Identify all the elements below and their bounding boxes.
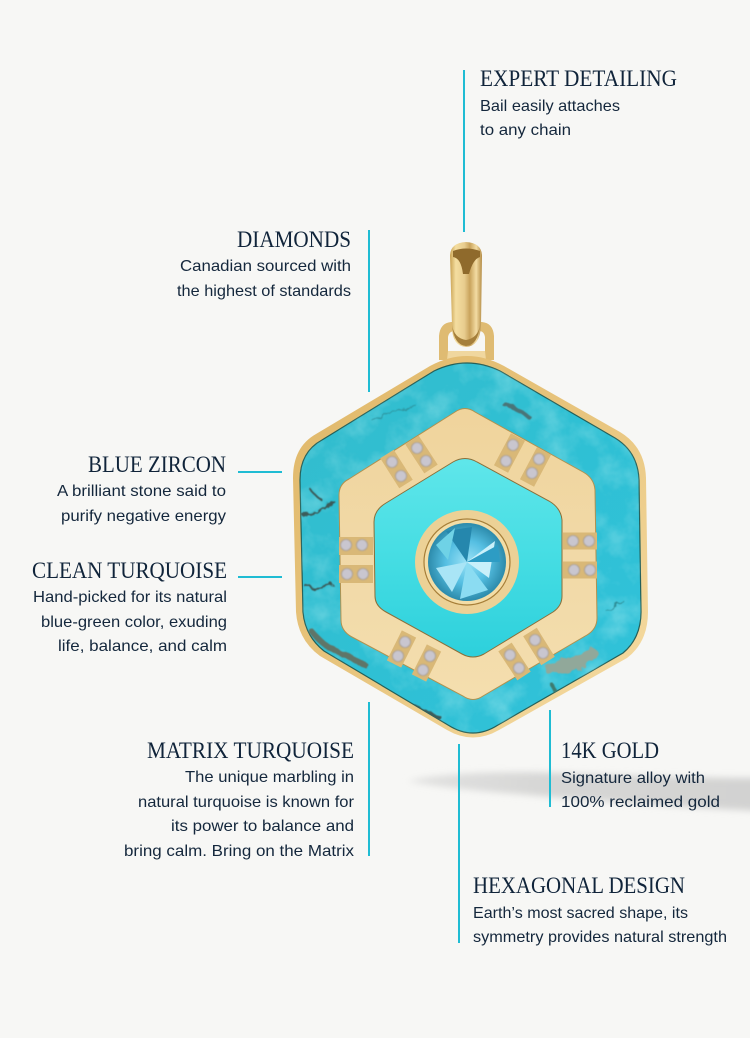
callout: matrix turquoise: MATRIX TURQUOISE bbox=[147, 738, 354, 764]
clean turquoise hexagon bbox=[374, 458, 562, 657]
callout: diamonds: Canadian sourced with bbox=[180, 258, 351, 275]
diamond pavé strips bbox=[339, 437, 597, 678]
callout: matrix turquoise: bring calm. Bring on the Matrix bbox=[124, 843, 354, 860]
callout: blue zircon: BLUE ZIRCON bbox=[88, 452, 226, 478]
callout: clean turquoise: life, balance, and calm bbox=[58, 638, 227, 655]
floor shadow bbox=[408, 772, 750, 811]
outer gold frame bbox=[293, 356, 648, 738]
callout: clean turquoise bbox=[32, 558, 282, 655]
callout: hexagonal design: symmetry provides natural strength bbox=[473, 929, 727, 946]
matrix veins bbox=[303, 405, 624, 716]
callout: matrix turquoise: natural turquoise is known for bbox=[138, 794, 355, 811]
bail link bbox=[439, 322, 494, 360]
callout: blue zircon: A brilliant stone said to bbox=[57, 483, 226, 500]
callout: matrix turquoise bbox=[124, 702, 370, 860]
callout: blue zircon bbox=[57, 452, 282, 525]
callout: hexagonal design bbox=[458, 744, 727, 946]
callout: diamonds bbox=[177, 227, 370, 392]
callout: expert detailing bbox=[463, 66, 677, 232]
callout: expert detailing: to any chain bbox=[480, 122, 571, 139]
callout: expert detailing: Bail easily attaches bbox=[480, 98, 620, 115]
callout: hexagonal design: Earth’s most sacred shape, its bbox=[473, 905, 688, 922]
callout: matrix turquoise: The unique marbling in bbox=[185, 769, 354, 786]
callout: blue zircon: purify negative energy bbox=[61, 508, 226, 525]
callout: 14k gold: Signature alloy with bbox=[561, 770, 705, 787]
callout: clean turquoise: blue-green color, exuding bbox=[41, 614, 227, 631]
marbling texture bbox=[295, 355, 645, 740]
bail loop bbox=[450, 242, 482, 347]
callout: 14k gold: 14K GOLD bbox=[561, 738, 659, 764]
callout: clean turquoise: CLEAN TURQUOISE bbox=[32, 558, 227, 584]
callout: diamonds: the highest of standards bbox=[177, 283, 351, 300]
callout: 14k gold bbox=[549, 710, 720, 811]
blue zircon in bezel bbox=[415, 510, 519, 614]
gold inner hexagon bbox=[339, 408, 597, 700]
callout: 14k gold: 100% reclaimed gold bbox=[561, 794, 720, 811]
callout: clean turquoise: Hand-picked for its natural bbox=[33, 589, 227, 606]
callout: expert detailing: EXPERT DETAILING bbox=[480, 66, 677, 92]
callout: matrix turquoise: its power to balance and bbox=[171, 818, 354, 835]
pendant bbox=[293, 242, 648, 740]
callout: hexagonal design: HEXAGONAL DESIGN bbox=[473, 873, 685, 899]
callout: diamonds: DIAMONDS bbox=[237, 227, 351, 253]
turquoise matrix ring bbox=[295, 355, 645, 740]
